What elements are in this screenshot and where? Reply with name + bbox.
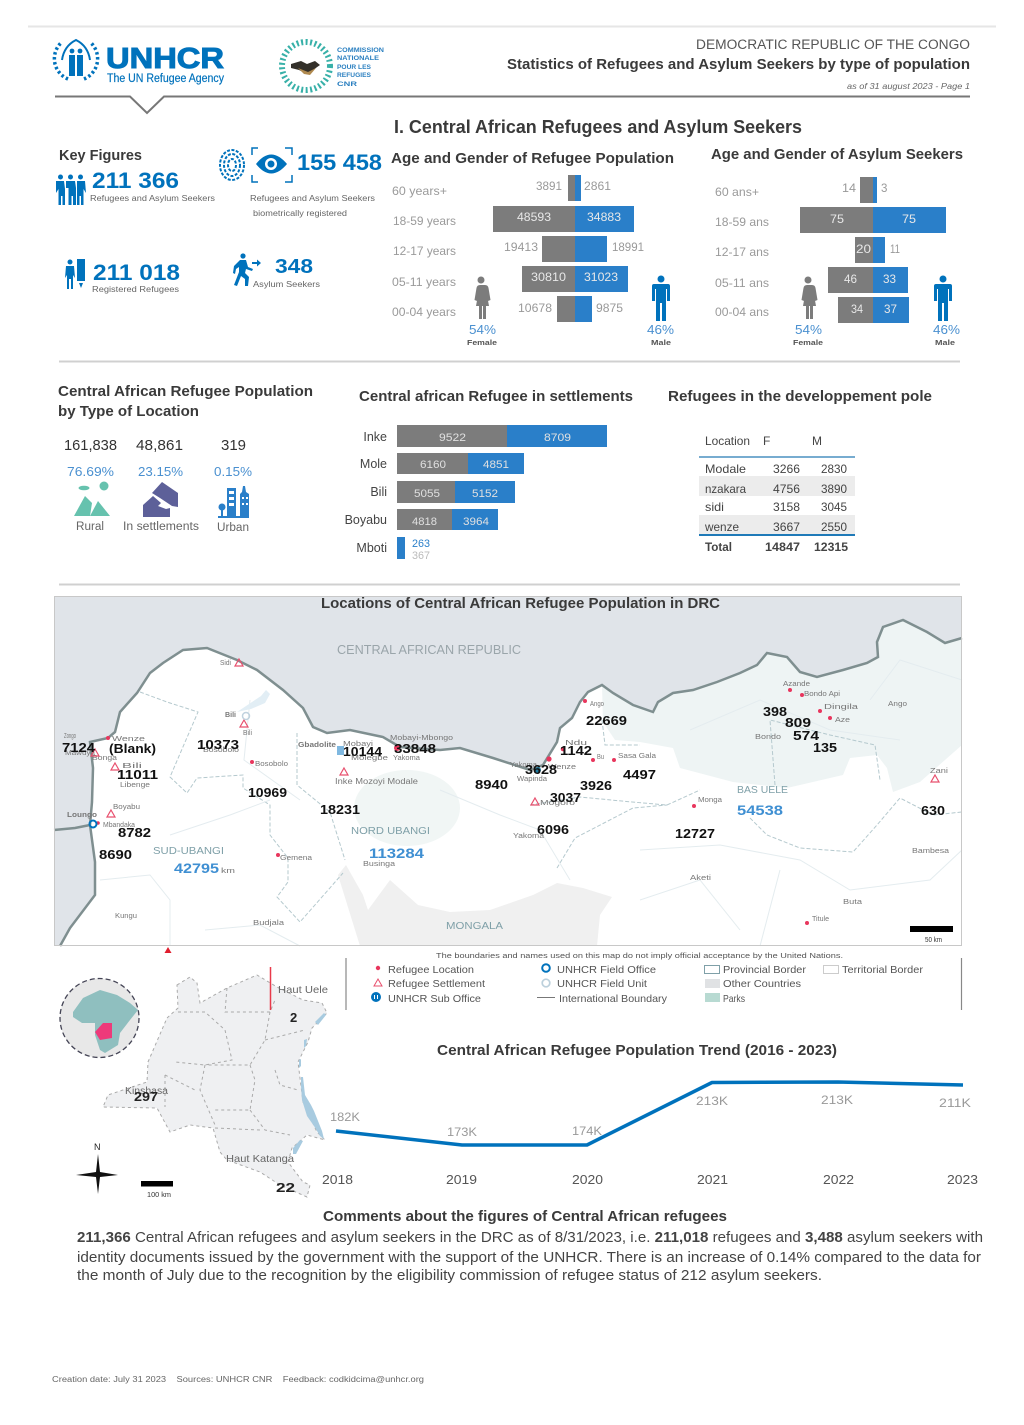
heading: key figures: Key Figures — [59, 147, 142, 164]
data labels: 211K — [939, 1096, 971, 1110]
values — [412, 432, 571, 562]
chart: age and gender of asylum seekers — [711, 146, 963, 347]
panel: key figures — [56, 147, 382, 294]
icon: male — [934, 276, 952, 321]
place labels: Bili — [243, 730, 252, 737]
place labels: Bosobolo — [255, 761, 288, 768]
population figures: 22669 — [586, 713, 627, 728]
table body: 3890 — [821, 482, 847, 496]
icon: rural — [74, 482, 110, 516]
icon: fingerprint — [220, 150, 244, 180]
icon: settlement — [143, 482, 178, 517]
population figures: 8940 — [475, 777, 508, 792]
international border — [54, 620, 962, 946]
values: 46 — [844, 274, 857, 286]
place labels: Mbandaka — [103, 822, 135, 829]
map legend: Parks — [723, 993, 745, 1005]
map legend: UNHCR Field Office — [557, 964, 656, 976]
red marker line — [270, 967, 272, 1010]
inset labels: Haut Katanga — [226, 1153, 294, 1165]
heading: Central african Refugee in settlements — [359, 388, 633, 405]
comments — [77, 1208, 983, 1284]
figures: 76.69% — [67, 464, 114, 479]
names: Mboti — [356, 541, 387, 555]
place labels: Yakoma — [393, 755, 420, 762]
partner logo: POUR LES — [337, 64, 372, 71]
place labels: Sidi — [220, 660, 231, 667]
year axis — [322, 1172, 978, 1187]
UNHCR logo — [54, 40, 224, 85]
figures: 0.15% — [214, 464, 252, 479]
heading — [58, 383, 313, 420]
table: refugees in the development pole — [668, 388, 932, 554]
compass: N — [94, 1142, 100, 1152]
inset labels: 22 — [276, 1180, 295, 1195]
age labels: 60 ans+ — [715, 185, 759, 199]
gender shares: Male — [935, 338, 955, 347]
map legend: International Boundary — [559, 993, 668, 1005]
place labels: Aze — [835, 717, 850, 724]
population figures: 33848 — [394, 741, 436, 756]
data labels: 182K — [330, 1110, 360, 1124]
age labels — [715, 185, 769, 319]
population figures: 4497 — [623, 767, 656, 782]
map legend: UNHCR Field Unit — [557, 978, 647, 990]
population figures: 10373 — [197, 737, 239, 752]
table body: 3158 — [773, 500, 800, 514]
map scale bar: 50 km — [925, 937, 942, 944]
province totals: km — [221, 868, 235, 875]
UNHCR logo: The UN Refugee Agency — [107, 73, 224, 85]
bars — [493, 175, 634, 322]
place labels: Inke Mozoyi Modale — [335, 777, 419, 786]
place labels: Monga — [698, 797, 722, 804]
population figures: 8690 — [99, 847, 132, 862]
province totals: 113284 — [369, 845, 424, 861]
place labels: Libenge — [120, 782, 150, 789]
chart: age and gender of refugee population — [391, 150, 674, 347]
figures: 161,838 — [64, 437, 117, 454]
population figures: 3926 — [580, 778, 612, 793]
heading: Refugees in the developpement pole — [668, 388, 932, 405]
section heading: I. Central African Refugees and Asylum Seekers — [394, 117, 802, 137]
values — [504, 181, 644, 315]
trend line — [336, 1082, 963, 1145]
province totals — [174, 802, 783, 876]
place labels: Yakoma — [513, 833, 544, 840]
place labels: Mobayi-Mbongo — [390, 735, 453, 742]
map legend: Provincial Border — [723, 964, 807, 976]
region labels — [153, 642, 788, 932]
figures: 319 — [221, 437, 246, 454]
population figures: 10969 — [248, 785, 287, 800]
table body: 3045 — [821, 500, 847, 514]
lake — [237, 690, 270, 712]
year axis: 2018 — [322, 1172, 353, 1187]
gender shares: Female — [793, 338, 823, 347]
age labels: 05-11 years — [392, 275, 456, 289]
values: 31023 — [584, 272, 618, 284]
icon: family — [56, 174, 86, 205]
inset labels: 2 — [290, 1010, 297, 1025]
place labels: Gbadolite — [298, 742, 336, 749]
chart: refugees in settlements — [345, 388, 633, 562]
figure: registered refugees — [92, 260, 180, 294]
place labels: Zani — [930, 768, 949, 775]
population figures: 574 — [793, 728, 820, 743]
place labels: Molegbe — [351, 755, 388, 762]
map title: Locations of Central African Refugee Population in DRC — [321, 595, 720, 612]
values: 3964 — [463, 516, 489, 528]
Mongala province — [338, 865, 612, 946]
age labels: 12-17 years — [393, 244, 456, 258]
year axis: 2021 — [697, 1172, 728, 1187]
population figures: 11011 — [117, 767, 158, 782]
place labels: Wenze — [548, 764, 576, 771]
population figures: 809 — [785, 715, 811, 730]
icon: asylum seeker — [233, 253, 261, 286]
age labels: 05-11 ans — [715, 276, 769, 290]
table body: Location — [705, 434, 750, 448]
values: 4851 — [483, 459, 509, 471]
UNHCR office markers — [90, 712, 541, 828]
year axis: 2019 — [446, 1172, 477, 1187]
labels: Rural — [76, 521, 104, 533]
gender shares: Female — [467, 338, 497, 347]
icon: female — [802, 276, 818, 319]
values: 37 — [884, 304, 897, 316]
place labels: Loungo — [67, 812, 97, 819]
heading: Central African Refugee Population — [58, 383, 313, 400]
population figures: 10144 — [343, 744, 383, 759]
population figures: 1142 — [560, 743, 592, 758]
values: 4818 — [412, 516, 437, 528]
marker: red triangle — [164, 947, 172, 953]
population figures: (Blank) — [109, 741, 156, 756]
UNHCR logo: UNHCR — [106, 43, 224, 75]
figure: biometrically registered — [250, 150, 382, 218]
map legend: Refugee Settlement — [388, 978, 485, 990]
icon: urban — [218, 486, 249, 518]
figure: asylum seekers: Asylum Seekers — [253, 280, 320, 289]
values: 10678 — [518, 303, 552, 315]
map: locations of Central African refugees — [54, 595, 962, 946]
table body: 14847 — [765, 540, 800, 554]
table body: Modale — [705, 462, 746, 476]
partner logo: COMMISSION — [337, 47, 384, 54]
report title: Statistics of Refugees and Asylum Seekers by type of population — [507, 56, 970, 73]
table body: nzakara — [705, 482, 746, 496]
values: 75 — [902, 214, 916, 226]
heading: by Type of Location — [58, 403, 199, 420]
map legend: UNHCR Sub Office — [388, 993, 481, 1005]
data labels: 173K — [447, 1125, 477, 1139]
place labels: Sasa Gala — [618, 753, 656, 760]
region labels: NORD UBANGI — [351, 825, 430, 837]
lakes — [293, 1013, 326, 1154]
report title: DEMOCRATIC REPUBLIC OF THE CONGO — [696, 37, 970, 52]
values: 19413 — [504, 242, 538, 254]
comments body — [77, 1230, 983, 1284]
map disclaimer: The boundaries and names used on this map do not imply official acceptance by the United Nations. — [436, 951, 843, 960]
population figures: 18231 — [320, 802, 360, 817]
table body: 2830 — [821, 462, 847, 476]
population figures — [62, 704, 945, 862]
age labels: 18-59 years — [393, 214, 456, 228]
figures — [64, 437, 252, 479]
values: 75 — [830, 214, 844, 226]
region labels: CENTRAL AFRICAN REPUBLIC — [337, 642, 521, 657]
values: 6160 — [420, 459, 446, 471]
table body: wenze — [704, 520, 739, 534]
gender shares: Male — [651, 338, 671, 347]
table body: 3266 — [773, 462, 800, 476]
population figures: 12727 — [675, 826, 715, 841]
inset: DRC country map — [103, 967, 328, 1197]
population figures: 135 — [813, 740, 837, 755]
place labels: Boyabu — [113, 804, 140, 811]
region labels: SUD-UBANGI — [153, 845, 224, 857]
labels: In settlements — [123, 521, 199, 533]
table body: 4756 — [773, 482, 800, 496]
place labels: Ango — [590, 701, 604, 708]
values: 3891 — [536, 181, 562, 193]
values: 5152 — [472, 488, 498, 500]
icon: female — [474, 276, 490, 319]
place labels: Bondo Api — [804, 691, 840, 698]
park: Nord Ubangi — [354, 770, 460, 846]
values: 30810 — [531, 272, 566, 284]
figure: asylum seekers — [253, 256, 320, 289]
data labels: 174K — [572, 1124, 602, 1138]
place labels: Bondo — [755, 734, 781, 741]
map legend: Territorial Border — [842, 964, 924, 976]
provincial borders — [140, 692, 962, 922]
figure: biometrically registered: 155 458 — [297, 150, 382, 175]
table body: 3667 — [773, 520, 800, 534]
population figures: 630 — [921, 803, 945, 818]
table body: M — [812, 434, 822, 448]
table body — [699, 434, 855, 554]
place labels: Aketi — [690, 875, 712, 882]
gender shares — [467, 322, 674, 347]
bars — [800, 177, 946, 323]
compass — [76, 1142, 118, 1194]
values: 8709 — [544, 432, 571, 444]
place labels: Bonga — [92, 755, 117, 762]
place labels: Bambesa — [912, 848, 949, 855]
figure: total refugees and asylum seekers — [90, 168, 215, 203]
year axis: 2020 — [572, 1172, 603, 1187]
place labels: Titule — [812, 916, 829, 923]
table body: 12315 — [814, 540, 848, 554]
map frame — [54, 596, 962, 946]
population figures: 3628 — [525, 762, 557, 777]
figure: total refugees and asylum seekers: Refugees and Asylum Seekers — [90, 194, 215, 203]
figure: biometrically registered: Refugees and Asylum Seekers — [250, 194, 375, 203]
data labels — [330, 1093, 971, 1139]
population figures: 6096 — [537, 822, 569, 837]
place labels: Mawuya — [65, 750, 95, 757]
population figures: 8782 — [118, 825, 151, 840]
map legend: Other Countries — [723, 978, 801, 990]
heading: Central African Refugee Population Trend (2016 - 2023) — [437, 1042, 837, 1059]
place labels: Bu — [597, 754, 604, 761]
values: 263 — [412, 538, 430, 550]
names: Mole — [360, 457, 387, 471]
location markers — [96, 688, 832, 925]
names: Boyabu — [345, 513, 387, 527]
age labels — [392, 184, 456, 319]
place labels: Businga — [363, 861, 395, 868]
values: 14 — [842, 183, 857, 195]
names — [345, 430, 387, 555]
panel: population by type of location — [58, 383, 313, 534]
figure: asylum seekers: 348 — [275, 256, 313, 278]
values: 5055 — [414, 488, 440, 500]
age labels: 18-59 ans — [715, 215, 769, 229]
partner logo — [282, 42, 384, 90]
map legend — [346, 958, 962, 1010]
heading: Age and Gender of Refugee Population — [391, 150, 674, 167]
place labels: Mobayi — [343, 741, 374, 748]
figures: 23.15% — [138, 464, 183, 479]
values: 11 — [890, 244, 900, 256]
data labels: 213K — [696, 1094, 728, 1108]
place labels: Wenze — [112, 736, 145, 743]
values: 48593 — [517, 212, 551, 224]
heading: Age and Gender of Asylum Seekers — [711, 146, 963, 163]
values — [830, 183, 916, 316]
gender shares: 46% — [647, 322, 674, 337]
year axis: 2022 — [823, 1172, 854, 1187]
figure: total refugees and asylum seekers: 211 366 — [92, 168, 179, 193]
figure: registered refugees: 211 018 — [93, 260, 180, 285]
values: 20 — [856, 244, 871, 256]
comments body: the month of July due to the recognition by the eligibility commission of refugee status of 212 asylum seekers. — [77, 1268, 822, 1284]
place labels: Mogoro — [540, 800, 575, 807]
partner logo: REFUGIES — [337, 72, 372, 79]
figures: 48,861 — [136, 437, 183, 454]
inset scale bar — [141, 1181, 173, 1199]
inset: globe locator — [60, 978, 139, 1058]
place labels: Yakoma — [510, 762, 537, 769]
inset scale bar: 100 km — [147, 1192, 171, 1199]
place labels: Azande — [783, 681, 810, 688]
table body: 2550 — [821, 520, 847, 534]
values: 9875 — [596, 303, 623, 315]
place labels: Ango — [888, 701, 907, 708]
inset labels: Haut Uele — [278, 984, 328, 996]
place labels: Dingila — [824, 704, 858, 711]
icon: eye scan — [252, 148, 292, 182]
place labels: Gemena — [280, 855, 312, 862]
settlement markers — [91, 659, 939, 817]
place labels: Zongo — [64, 733, 76, 740]
table body: sidi — [705, 500, 724, 514]
gender shares: 46% — [933, 322, 960, 337]
partner logo: CNR — [337, 81, 357, 88]
comments body: 211,366 Central African refugees and asylum seekers in the DRC as of 8/31/2023, i.e. 211,018 refugees and 3,488 asylum seekers with — [77, 1230, 983, 1246]
table body: Total — [705, 540, 732, 554]
province lines — [165, 988, 305, 1135]
population figures: 7124 — [62, 740, 96, 755]
place labels — [64, 660, 949, 927]
data labels: 213K — [821, 1093, 853, 1107]
partner logo: NATIONALE — [337, 55, 380, 62]
report title: as of 31 august 2023 - Page 1 — [847, 82, 970, 91]
names: Bili — [370, 485, 387, 499]
map scale bar — [910, 926, 953, 944]
footer: Creation date: July 31 2023 Sources: UNHCR CNR Feedback: codkidcima@unhcr.org — [52, 1375, 424, 1384]
region labels: BAS UELE — [737, 784, 788, 796]
values: 33 — [883, 274, 896, 286]
land — [60, 620, 962, 946]
population figures: 398 — [763, 704, 787, 719]
values: 34883 — [587, 212, 621, 224]
inset labels: 297 — [134, 1089, 158, 1104]
gender shares — [793, 322, 960, 347]
population figures: 3037 — [550, 790, 581, 805]
report title — [507, 37, 970, 91]
comments body: identity documents issued by the government with the support of the UNHCR. There is an increase of 0.14% compared to the data for — [77, 1250, 981, 1266]
values: 367 — [412, 550, 430, 562]
map legend: Refugee Location — [388, 964, 474, 976]
territory borders and rivers — [100, 660, 962, 946]
values: 3 — [881, 183, 887, 195]
place labels: Budjala — [253, 920, 284, 927]
names: Inke — [363, 430, 387, 444]
icon: registered refugee — [65, 259, 85, 289]
values: 2861 — [584, 181, 611, 193]
place labels: Wapinda — [517, 776, 547, 783]
age labels: 60 years+ — [392, 184, 447, 198]
bars — [397, 425, 607, 559]
place labels: Bosobolo — [203, 747, 239, 754]
place labels: Bili — [225, 712, 236, 719]
year axis: 2023 — [947, 1172, 978, 1187]
figure: biometrically registered: biometrically registered — [253, 209, 347, 218]
place labels: Buta — [843, 899, 862, 906]
labels: Urban — [217, 522, 249, 534]
age labels: 12-17 ans — [715, 245, 769, 259]
values: 9522 — [439, 432, 466, 444]
province totals: 42795 — [174, 860, 219, 876]
values: 34 — [851, 304, 864, 316]
gender shares: 54% — [469, 322, 496, 337]
place labels: Bili — [122, 763, 143, 770]
values: 18991 — [612, 242, 644, 254]
inset labels: Kinshasa — [125, 1086, 168, 1097]
inset labels — [125, 984, 328, 1195]
labels — [76, 521, 249, 534]
age labels: 00-04 ans — [715, 305, 769, 319]
comments heading: Comments about the figures of Central African refugees — [323, 1208, 727, 1225]
table body: F — [763, 434, 770, 448]
age labels: 00-04 years — [392, 305, 456, 319]
chart: population trend — [322, 1042, 978, 1187]
park: Bili-Uere — [602, 620, 962, 792]
region labels: MONGALA — [446, 920, 503, 932]
place labels: Kungu — [115, 913, 137, 920]
figure: registered refugees: Registered Refugees — [92, 285, 179, 294]
province totals: 54538 — [737, 802, 783, 818]
icon: male — [652, 276, 670, 321]
gender shares: 54% — [795, 322, 822, 337]
place labels: Ndu — [565, 740, 587, 747]
